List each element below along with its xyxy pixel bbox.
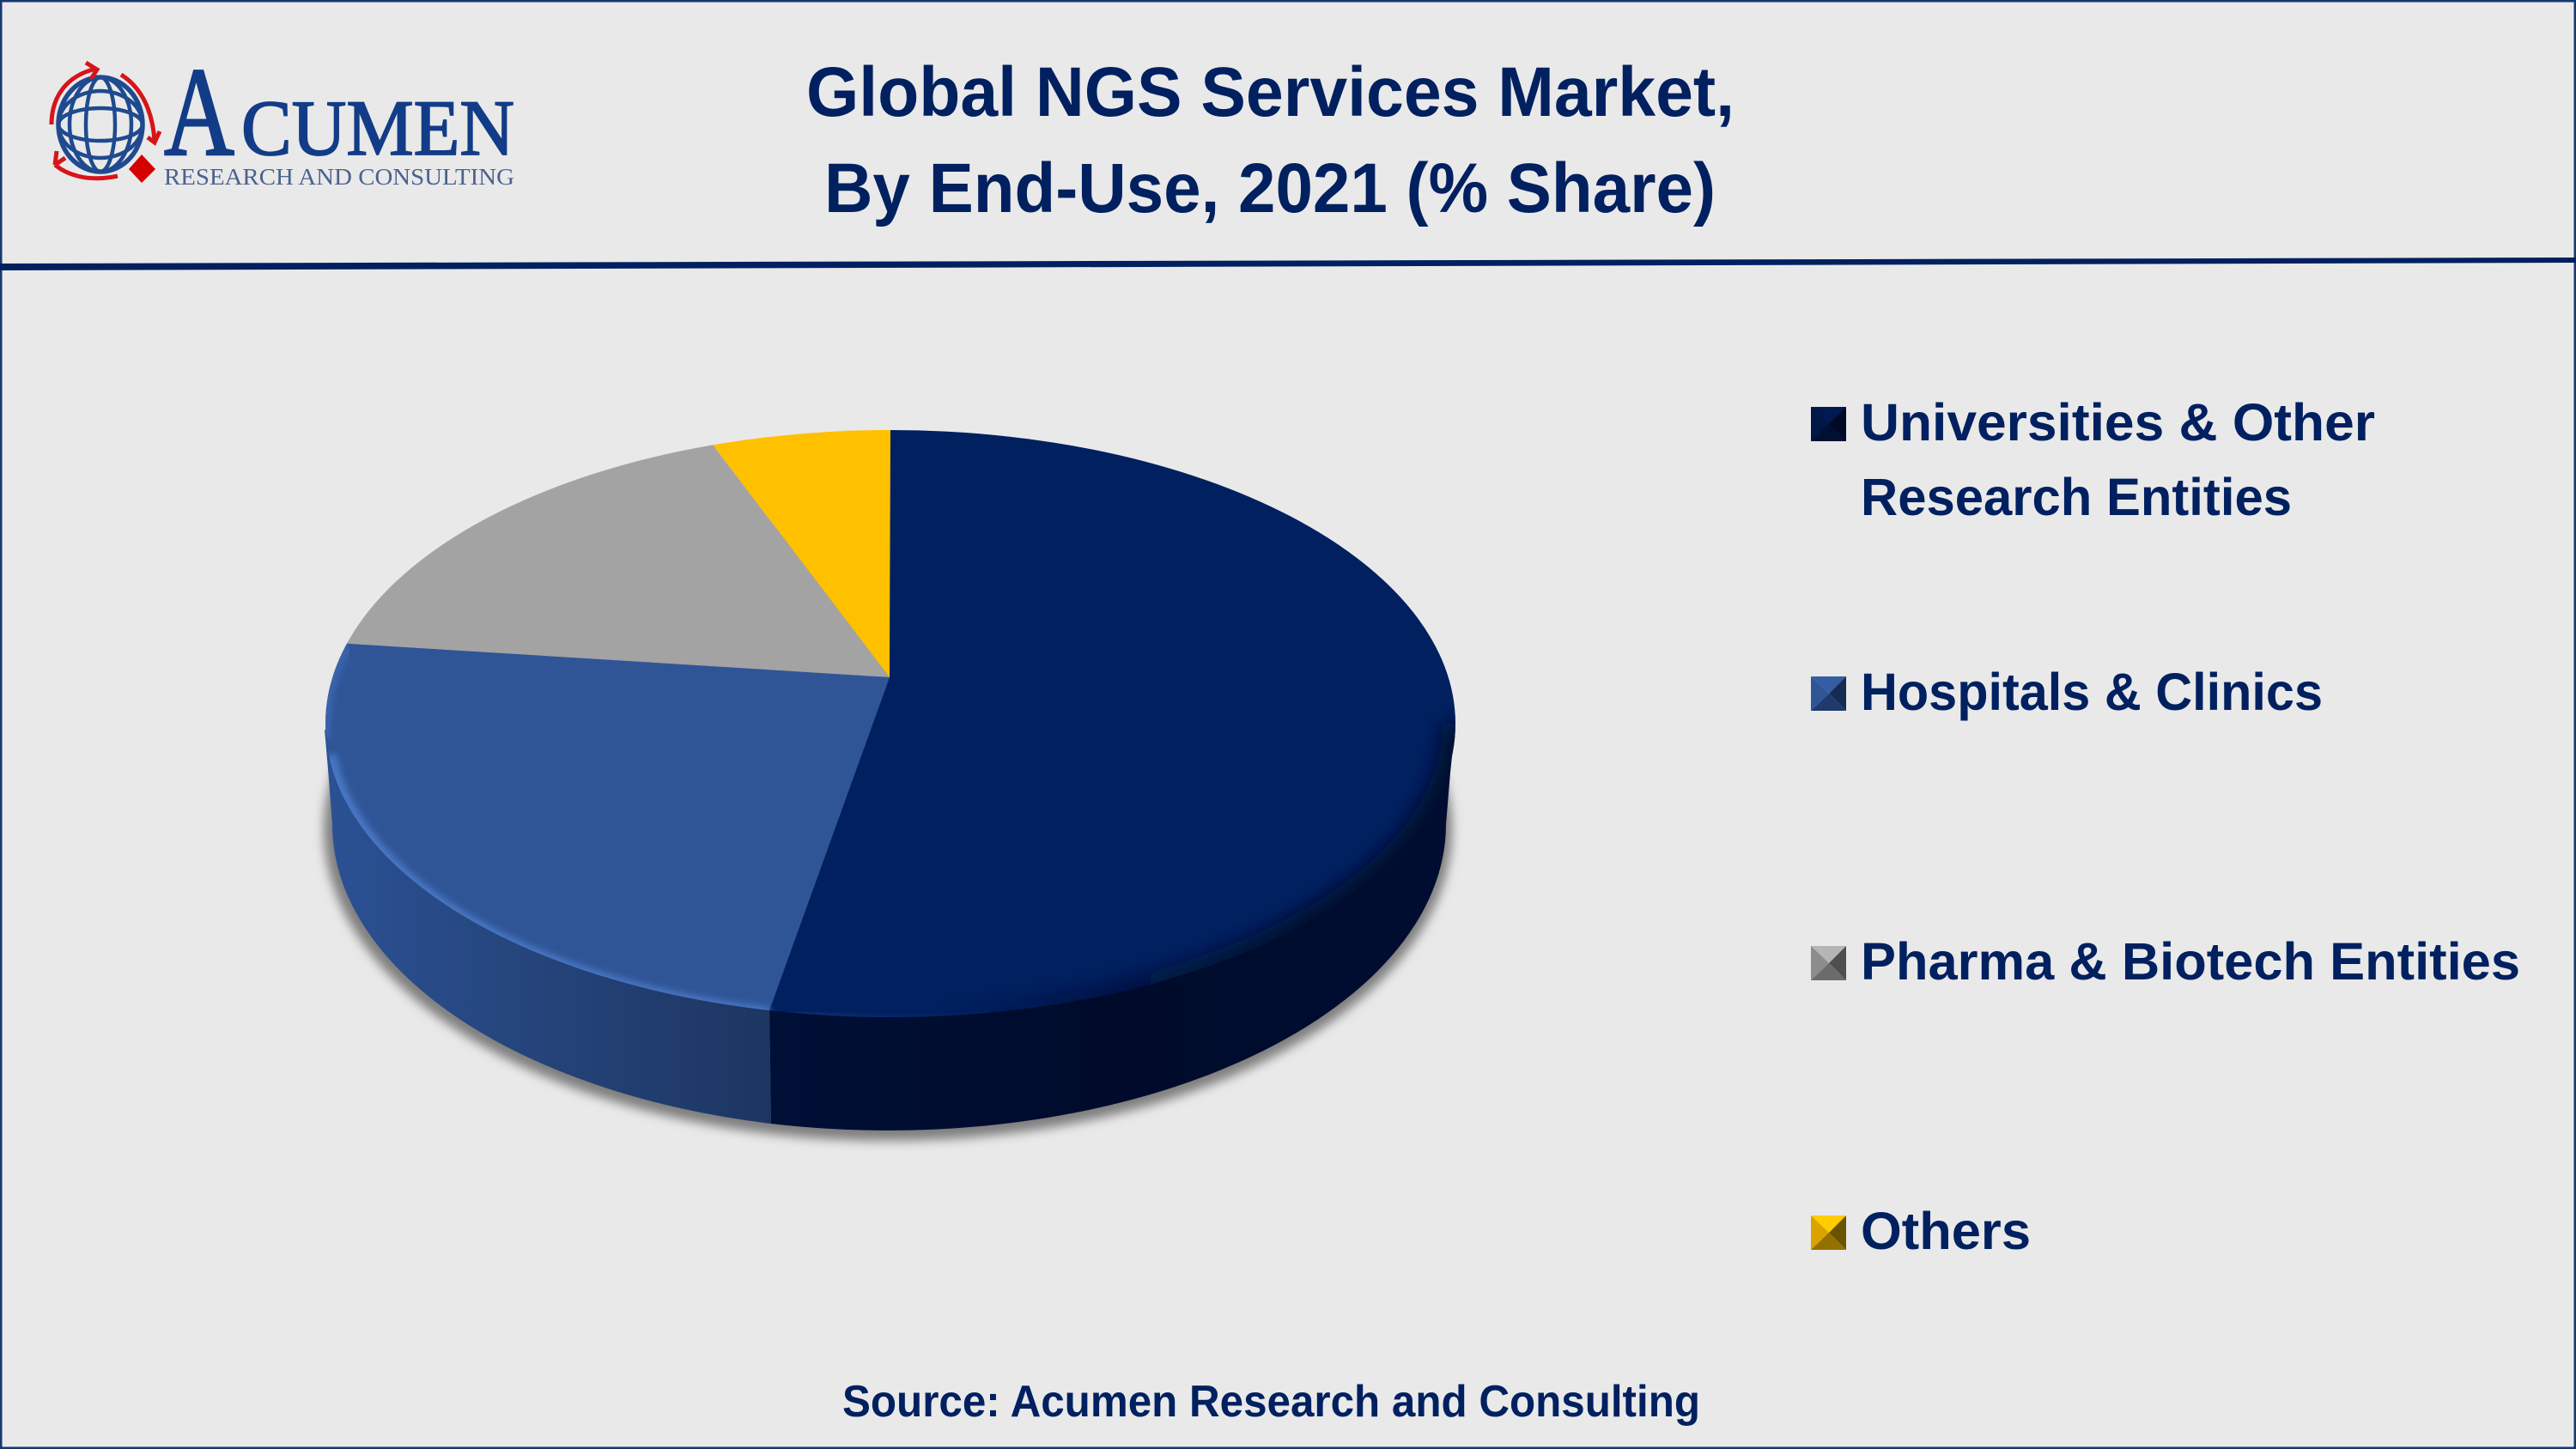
icon: globe [58, 77, 143, 172]
title: Global NGS Services Market, [806, 53, 1735, 131]
rim highlight: hospitals [331, 755, 769, 1013]
pie side: universities [769, 724, 1455, 1131]
legend item: universities [1811, 393, 2375, 526]
slice: hospitals and clinics [309, 641, 890, 1026]
logo wordmark: A [164, 42, 234, 183]
logo: Acumen Research and Consulting [52, 42, 514, 190]
pie top face [309, 425, 1468, 1026]
icon: red circular arrows [52, 63, 160, 179]
pie side: hospitals and clinics [325, 730, 771, 1124]
rim shade: universities [995, 712, 1455, 1011]
legend [1811, 393, 2520, 1260]
slice: universities and other research entities [766, 425, 1468, 1026]
logo wordmark: RESEARCH AND CONSULTING [164, 164, 514, 190]
slice: pharma and biotech entities [347, 445, 890, 677]
title [806, 53, 1735, 227]
3D pie chart [309, 425, 1468, 1141]
legend item: universities: Universities & Other [1861, 393, 2375, 452]
source note: Source: Acumen Research and Consulting [842, 1377, 1700, 1427]
header divider [0, 258, 2576, 270]
title: By End-Use, 2021 (% Share) [824, 149, 1716, 227]
pie shadow [324, 518, 1452, 1141]
legend item: pharma: Pharma & Biotech Entities [1861, 932, 2520, 991]
legend item: universities: Research Entities [1861, 468, 2292, 526]
legend item: hospitals: Hospitals & Clinics [1861, 663, 2323, 721]
rim highlight: universities [787, 1012, 906, 1017]
logo wordmark [164, 42, 514, 190]
legend item: others: Others [1861, 1202, 2031, 1260]
logo wordmark: CUMEN [241, 84, 514, 172]
slice: others [713, 425, 890, 677]
icon: red diamond [129, 155, 155, 183]
rim highlight: left [325, 646, 347, 738]
